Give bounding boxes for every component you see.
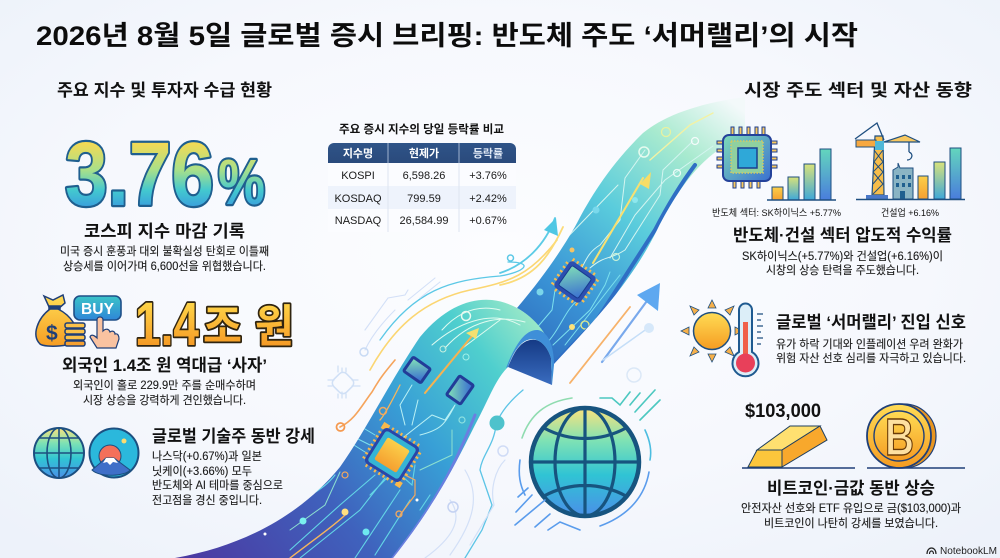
small chip B (444, 374, 476, 406)
icon: chip (717, 127, 777, 188)
gold baseline (742, 467, 855, 469)
chip: upper ribbon (553, 260, 597, 304)
table title: 주요 증시 지수의 당일 등락률 비교 (339, 122, 504, 136)
table data: 26,584.99 (400, 215, 448, 227)
foreign body (73, 378, 256, 407)
main chip (363, 426, 421, 484)
arrow head: blue (637, 283, 660, 311)
table data: +3.76% (469, 170, 507, 182)
icon: gold bar (748, 426, 827, 467)
tech body (152, 449, 283, 507)
panel: KOSPI (60, 125, 269, 273)
icon: thermometer (732, 304, 763, 376)
table header: 지수명 (343, 147, 373, 160)
table data: NASDAQ (335, 215, 382, 227)
tech body: 반도체와 AI 테마를 중심으로 (152, 479, 283, 492)
icon: buy button: BUY (81, 301, 115, 318)
table data: KOSPI (341, 170, 375, 182)
title: 2026년 8월 5일 글로벌 증시 브리핑: 반도체 주도 ‘서머랠리’의 시작 (36, 21, 858, 51)
sector body: 시창의 상승 탄력을 주도했습니다. (766, 264, 919, 277)
table header: 현제가 (409, 146, 439, 160)
KOSPI body: 상승세를 이어가며 6,600선을 위협했습니다. (63, 260, 266, 273)
construction label: 건설업 +6.16% (881, 207, 940, 219)
arrow head: upper ribbon (640, 172, 651, 189)
KOSPI body: 미국 증시 훈풍과 대외 불확실성 탄회로 이틀째 (60, 245, 269, 258)
1.4조 원: 원 (255, 301, 294, 352)
table data: 6,598.26 (403, 170, 445, 182)
rally body: 위험 자산 선호 심리를 자극하고 있습니다. (776, 351, 966, 365)
big number 3.76%: 3.76 (65, 125, 214, 225)
sector heading: 반도체·건설 섹터 압도적 수익률 (733, 226, 952, 245)
heading: left column: 주요 지수 및 투자자 수급 현황 (57, 81, 272, 100)
tech body: 닛케이(+3.66%) 모두 (152, 465, 252, 478)
table data: +2.42% (469, 193, 507, 205)
chart: construction bars (856, 148, 965, 200)
arrow head: cyan (544, 218, 558, 236)
KOSPI body (60, 245, 269, 273)
table data: 799.59 (407, 193, 441, 205)
big number 3.76%: % (218, 146, 265, 218)
fold inner band (506, 330, 554, 385)
icon: crane (855, 123, 920, 199)
ribbon illustration (175, 97, 745, 558)
icon: bitcoin (867, 404, 936, 468)
icon: globe (34, 428, 84, 478)
1.4조 원: 1.4 (135, 290, 199, 358)
table rows (328, 143, 516, 232)
heading: right column: 시장 주도 섹터 및 자산 동향 (744, 81, 972, 100)
icon: mount fuji (90, 428, 138, 478)
outer circuit traces around ribbon (328, 218, 655, 558)
foreign heading: 외국인 1.4조 원 역대급 ‘사자’ (62, 356, 267, 375)
chart: semiconductor bars (767, 149, 836, 200)
panel: summer rally (681, 300, 966, 376)
foreign body: 시장 상승을 강력하게 견인했습니다. (83, 393, 246, 407)
icon: buy button (74, 296, 121, 320)
icon: money bag (36, 295, 85, 346)
1.4조 원 (135, 290, 294, 358)
sector body (742, 249, 943, 277)
tech heading: 글로벌 기술주 동반 강세 (152, 427, 315, 446)
semiconductor label: 반도체 섹터: SK하이닉스 +5.77% (712, 207, 842, 219)
upper ribbon (517, 97, 745, 365)
foreign body: 외국인이 홀로 229.9만 주를 순매수하며 (73, 378, 256, 392)
globe (515, 390, 660, 530)
gold price: $103,000 (745, 401, 821, 422)
panel: index table (328, 122, 516, 232)
panel: foreign buying (36, 290, 294, 407)
panel: global tech (34, 427, 315, 507)
tech body: 전고점을 경신 중입니다. (152, 493, 262, 507)
panel: bitcoin and gold (741, 401, 965, 530)
lower ribbon (175, 300, 552, 558)
icon: pointing hand (90, 317, 119, 348)
bitcoin baseline (867, 467, 965, 469)
table data: +0.67% (469, 215, 507, 227)
bitcoin body: 비트코인이 나탄히 강세를 보였습니다. (764, 516, 938, 530)
table header (343, 146, 503, 160)
icon: sun (681, 300, 743, 362)
table data: KOSDAQ (334, 193, 382, 205)
rally body (776, 337, 966, 365)
rally heading: 글로벌 ‘서머랠리’ 진입 신호 (776, 313, 966, 332)
1.4조 원: 조 (203, 301, 242, 352)
table header: 등락률 (473, 147, 503, 160)
KOSPI heading: 코스피 지수 마감 기록 (84, 222, 245, 241)
icon: bitcoin: B (885, 409, 914, 467)
tech body: 나스닥(+0.67%)과 일본 (152, 449, 262, 463)
icon: dollar: $ (46, 322, 58, 345)
NotebookLM badge: NotebookLM (940, 546, 997, 557)
sector body: SK하이닉스(+5.77%)와 건설업(+6.16%)이 (742, 249, 943, 263)
small chip A (401, 355, 433, 385)
icon: building (893, 163, 913, 199)
bitcoin body (741, 502, 961, 530)
fold underside (508, 340, 552, 385)
bitcoin body: 안전자산 선호와 ETF 유입으로 금($103,000)과 (741, 502, 961, 515)
bitcoin heading: 비트코인·금값 동반 상승 (767, 479, 935, 498)
table data (334, 170, 507, 227)
panel: sectors (712, 123, 965, 277)
rally body: 유가 하락 기대와 인플레이션 우려 완화가 (776, 337, 963, 351)
arrow head: lower ribbon (466, 328, 479, 339)
